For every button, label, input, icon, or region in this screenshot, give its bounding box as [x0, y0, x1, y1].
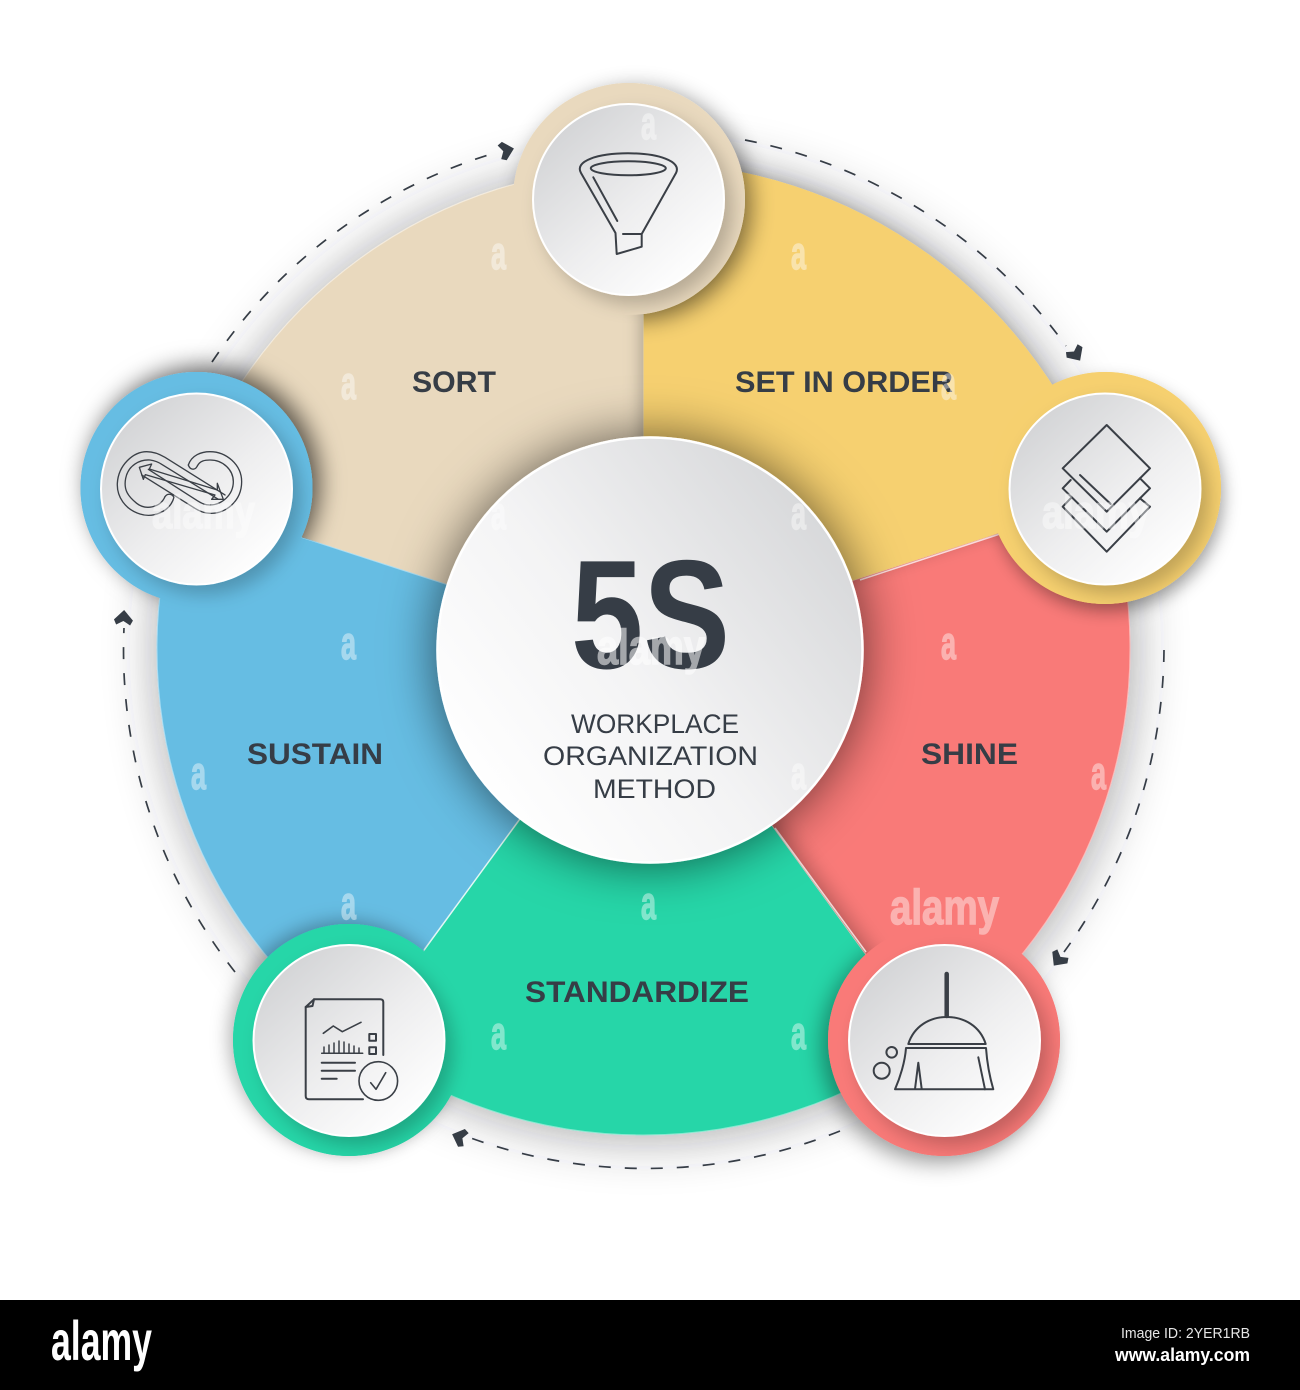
label: sustain: SUSTAIN: [247, 738, 383, 771]
node: sort: [513, 83, 745, 315]
watermarks: a: [491, 487, 506, 539]
footer image id: Image ID: 2YER1RB: [1121, 1325, 1250, 1342]
icon: broom: [874, 974, 993, 1089]
watermarks: a: [341, 617, 356, 669]
node: set in order: [989, 372, 1221, 604]
footer logo: alamy: [51, 1309, 152, 1372]
center subtitle: ORGANIZATION: [543, 741, 758, 771]
watermarks: a: [341, 357, 356, 409]
watermarks: alamy: [890, 881, 999, 935]
center circle: [438, 438, 862, 862]
center subtitle: METHOD: [593, 774, 716, 804]
footer bar: [0, 1300, 1300, 1390]
watermarks: a: [791, 1007, 806, 1059]
dashed cycle arrows: [114, 139, 1164, 1168]
icon: layers: [1063, 425, 1150, 552]
shadow of standardize on shine: [772, 816, 880, 954]
node: standardize: [233, 924, 465, 1156]
center subtitle: WORKPLACE: [571, 709, 739, 739]
segment: set in order: [644, 162, 1106, 648]
ring shadows: [80, 83, 1221, 1156]
watermarks: a: [341, 877, 356, 929]
watermarks: a: [1091, 747, 1106, 799]
label: sort: SORT: [412, 366, 496, 399]
watermarks: a: [941, 617, 956, 669]
segment separators: [424, 534, 1000, 952]
watermarks: alamy: [597, 621, 705, 675]
node: sustain: [80, 372, 312, 604]
segment: shine: [644, 498, 1130, 1042]
watermarks: a: [791, 487, 806, 539]
icon: report document: [306, 999, 398, 1100]
watermarks: a: [941, 357, 956, 409]
watermarks: a: [791, 227, 806, 279]
label: set in order: SET IN ORDER: [735, 366, 953, 399]
center subtitle: [543, 709, 758, 804]
segment: sustain: [157, 498, 644, 1042]
segment: standardize: [358, 648, 930, 1135]
footer url: www.alamy.com: [1114, 1345, 1250, 1365]
watermarks: a: [491, 747, 506, 799]
watermarks: [152, 97, 1150, 1059]
icon: infinity with arrows: [117, 452, 242, 515]
watermarks: alamy: [1042, 486, 1150, 538]
watermarks: alamy: [152, 486, 255, 538]
icon: funnel: [580, 153, 677, 254]
watermarks: a: [641, 97, 656, 149]
label: standardize: STANDARDIZE: [525, 976, 749, 1009]
watermarks: a: [491, 1007, 506, 1059]
node: shine: [828, 924, 1060, 1156]
center title: 5S: 5S: [571, 528, 730, 701]
segment: sort: [185, 166, 644, 648]
watermarks: a: [641, 877, 656, 929]
pie segments: [157, 162, 1130, 1135]
watermarks: a: [191, 747, 206, 799]
watermarks: a: [491, 227, 506, 279]
watermarks: a: [791, 747, 806, 799]
label: shine: SHINE: [921, 738, 1018, 771]
